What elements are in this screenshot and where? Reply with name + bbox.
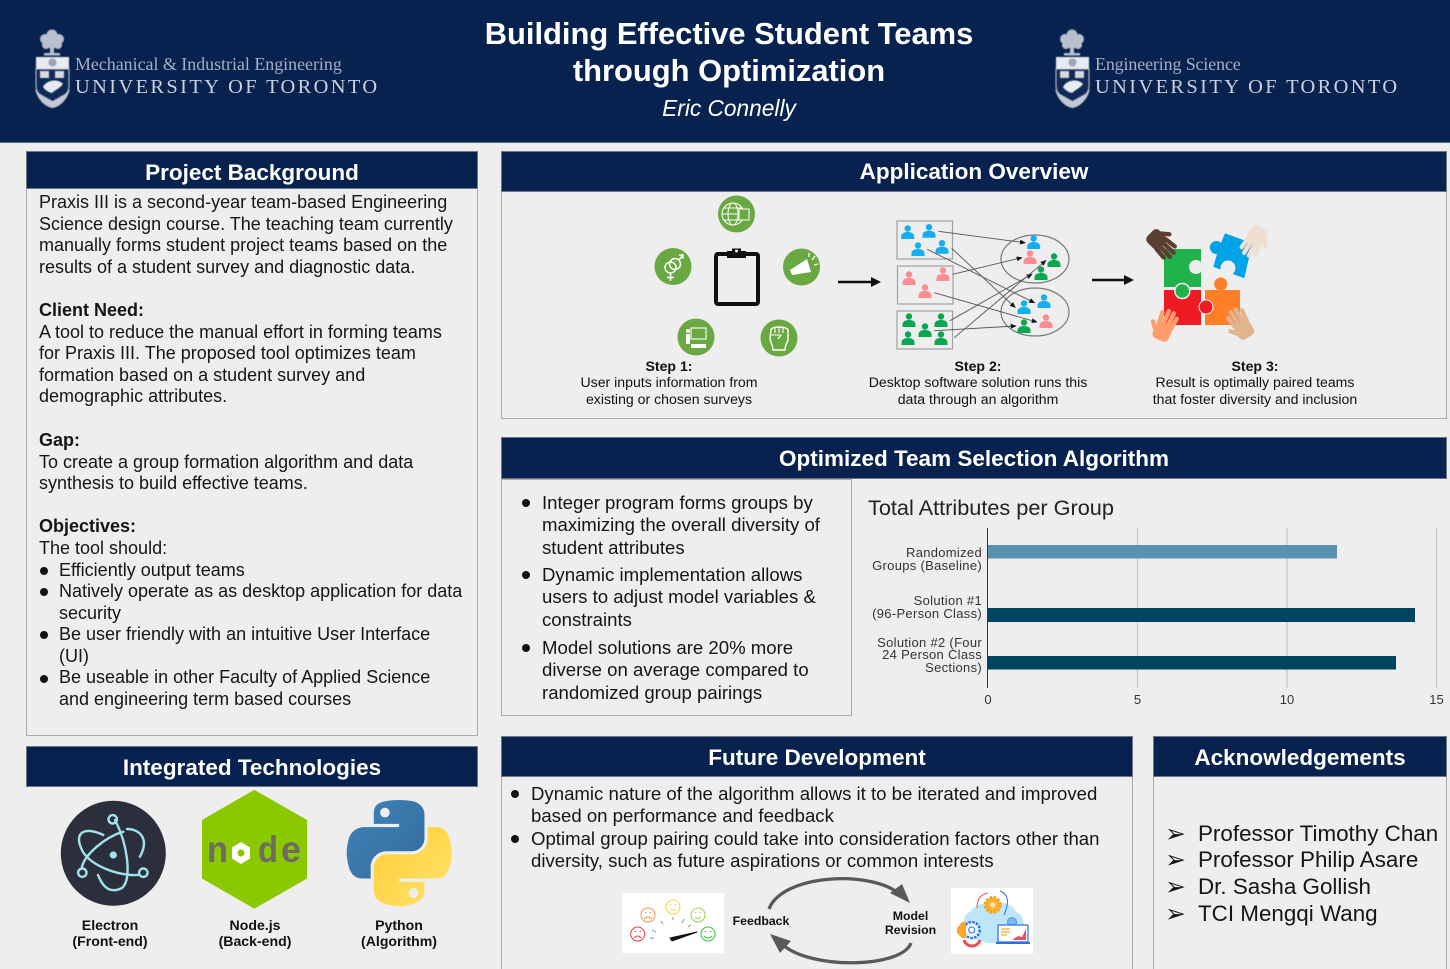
icon: python logo [347,800,452,906]
bullet: dynamic implementation: constraints [542,609,632,630]
text: course description: Science design course. The teaching team currently [39,214,453,234]
caption: electron: (Front-end) [72,933,148,949]
bullet: integer program: student attributes [542,537,685,558]
list: objectives: Be useable in other Faculty of Applied Science [59,667,430,687]
label: model revision: Revision [885,923,936,937]
axis tick labels: 0 [984,692,992,707]
text: objectives: Objectives: [39,516,136,536]
text: future development bullets [511,783,1099,871]
text: step 1: Step 1: [646,358,692,374]
bar: randomized groups [988,545,1337,558]
panel: algorithm bullet points [501,479,852,716]
list: objectives: Be user friendly with an intuitive User Interface [59,624,430,644]
text: future development bullets: Optimal group pairing could take into consideration factors other than [531,828,1099,849]
arrow: feedback to model revision [769,879,910,909]
list: objectives [40,560,462,709]
category labels: Solution #1 [914,593,982,608]
icon: puzzle and hands [1144,224,1273,344]
text: future development bullets: Dynamic nature of the algorithm allows it to be iterated and improved [531,783,1097,804]
text: course description: results of a student survey and diagnostic data. [39,257,415,277]
text: gap [39,430,414,493]
text: client need: A tool to reduce the manual effort in forming teams [39,322,442,342]
icon: University of Toronto crest (right) [1054,28,1090,109]
text: course description [39,192,453,277]
caption: python: Python [375,916,423,932]
title: Building Effective Student Teams [485,16,973,51]
text: client need: Client Need: [39,300,144,320]
panel: acknowledgements [1153,736,1447,969]
icon: node.js logo: e [281,829,301,870]
heading: acknowledgements [1153,736,1447,777]
text: gap: synthesis to build effective teams. [39,473,308,493]
text: step 3: Result is optimally paired teams [1156,374,1354,390]
icon: node.js logo: d [258,829,278,870]
text: gap: To create a group formation algorithm and data [39,452,413,472]
text: step 2: Desktop software solution runs this [869,374,1087,390]
arrow: step 2 to step 3 [1092,275,1134,285]
assignment arrows [927,231,1046,338]
axis tick labels: 10 [1280,692,1294,707]
bar chart: total attributes per group [872,528,1444,707]
text: future development bullets: diversity, such as future aspirations or common interests [531,850,994,871]
author: Eric Connelly [662,95,796,121]
category labels: Randomized [906,545,982,560]
heading: integrated technologies [26,746,478,787]
bullet: integer program [522,492,820,558]
panel: future development [501,736,1133,969]
caption: node.js: Node.js [230,916,280,932]
caption: electron: Electron [82,916,138,932]
label: feedback: Feedback [733,914,790,928]
list: acknowledged people: ➢ [1165,872,1186,901]
list: objectives: security [59,603,121,623]
logo text: department right: Engineering Science [1095,54,1241,74]
student groups [897,221,1069,349]
text: client need: demographic attributes. [39,386,227,406]
icon: raised fist [760,320,798,356]
text: client need: formation based on a student survey and [39,365,365,385]
axis tick labels: 15 [1429,692,1444,707]
logo text: university right: UNIVERSITY OF TORONTO [1095,76,1400,98]
students in groups [901,224,1050,314]
label: model revision: Model [893,909,928,923]
heading: optimized team selection algorithm: Optimized Team Selection Algorithm [779,446,1169,471]
bullet: dynamic implementation [522,564,816,630]
text: gap: Gap: [39,430,80,450]
category labels: 24 Person Class [882,647,982,662]
axis tick labels [984,692,1444,707]
name: Mengqi Wang: TCI Mengqi Wang [1198,901,1378,926]
text: objectives: The tool should: [39,538,167,558]
list: acknowledged people [1165,819,1438,928]
logo text: department left: Mechanical & Industrial Engineering [75,54,342,74]
caption: node.js: (Back-end) [219,933,291,949]
text: step 3 [1152,358,1357,407]
category labels: Solution #2 (Four [877,635,982,650]
heading: project background: Project Background [145,160,359,185]
bar: solution 2 [988,656,1396,670]
name: Sasha Gollish: Dr. Sasha Gollish [1198,874,1371,899]
icon group: survey inputs [654,196,820,356]
chart title: Total Attributes per Group [868,495,1114,520]
text: step 3: that foster diversity and inclusion [1153,391,1357,407]
bullet: integer program: maximizing the overall diversity of [542,514,820,535]
icon: megaphone [783,248,820,286]
category labels: Sections) [925,660,982,675]
icon: node.js logo [203,791,306,908]
header banner [0,0,1450,143]
panel: application overview [501,151,1447,419]
list: objectives: Efficiently output teams [59,560,245,580]
heading: future development: Future Development [708,745,926,770]
caption: node.js [219,916,291,949]
heading: application overview: Application Overview [860,159,1088,184]
caption: electron [72,916,148,949]
text: step 3: Step 3: [1232,358,1278,374]
heading: project background [26,151,478,189]
heading: optimized team selection algorithm [501,437,1447,479]
bullet: model solutions: diverse on average compared to [542,659,809,680]
bullet: model solutions [522,637,809,703]
text: step 1 [580,358,758,407]
logo text: university left: UNIVERSITY OF TORONTO [75,76,380,98]
text: client need [39,300,442,406]
icon: teacher at board [678,318,714,356]
caption: python: (Algorithm) [361,933,437,949]
heading: integrated technologies: Integrated Technologies [123,755,381,780]
diagram: team assignment [897,221,1069,349]
icon: gender symbols [654,248,692,285]
heading: acknowledgements: Acknowledgements [1194,745,1406,770]
text: step 1: existing or chosen surveys [586,391,752,407]
list: acknowledged people: ➢ [1165,819,1186,848]
icon: language globe [718,196,755,232]
text: course description: manually forms student project teams based on the [39,235,447,255]
panel: project background [26,151,478,736]
icon: node.js logo: n [207,829,228,870]
category labels [872,545,982,675]
icon: electron logo [61,801,166,906]
bullet: model solutions: randomized group pairings [542,682,762,703]
bullet: model solutions: Model solutions are 20% more [542,637,793,658]
bullet: integer program: Integer program forms groups by [542,492,813,513]
text: course description: Praxis III is a second-year team-based Engineering [39,192,447,212]
title [485,16,973,88]
text: objectives [39,516,167,558]
category labels: (96-Person Class) [872,606,982,621]
icon: model revision gears and laptop [951,888,1033,954]
panel: integrated technologies [26,746,478,969]
list: acknowledged people: ➢ [1165,899,1186,928]
list: objectives: (UI) [59,646,89,666]
panel: optimized team selection algorithm [501,437,1447,716]
text: client need: for Praxis III. The proposed tool optimizes team [39,343,416,363]
category labels: Groups (Baseline) [872,558,982,573]
bullet: dynamic implementation: Dynamic implementation allows [542,564,802,585]
list: acknowledged people: ➢ [1165,845,1186,874]
arrow: step 1 to step 2 [838,277,881,287]
axis tick labels: 5 [1134,692,1141,707]
list: objectives: Natively operate as as desktop application for data [59,581,462,601]
icon: feedback gauge [622,893,724,953]
icon: University of Toronto crest (left) [34,28,70,109]
icon: clipboard [716,248,758,304]
text: future development bullets: based on performance and feedback [531,805,834,826]
bullet: dynamic implementation: users to adjust model variables & [542,586,816,607]
name: Philip Asare: Professor Philip Asare [1198,847,1418,872]
arrow: model revision to feedback [770,934,911,963]
list: objectives: and engineering term based courses [59,689,351,709]
text: step 2: Step 2: [954,358,1002,374]
text: step 1: User inputs information from [580,374,758,390]
name: Timothy Chan: Professor Timothy Chan [1198,821,1438,846]
heading: future development [501,736,1133,777]
text: step 2: data through an algorithm [898,391,1058,407]
bar: solution 1 [988,608,1415,622]
title: through Optimization [573,53,885,88]
caption: python [361,916,437,949]
text: step 2 [869,358,1087,407]
heading: application overview [501,151,1447,192]
